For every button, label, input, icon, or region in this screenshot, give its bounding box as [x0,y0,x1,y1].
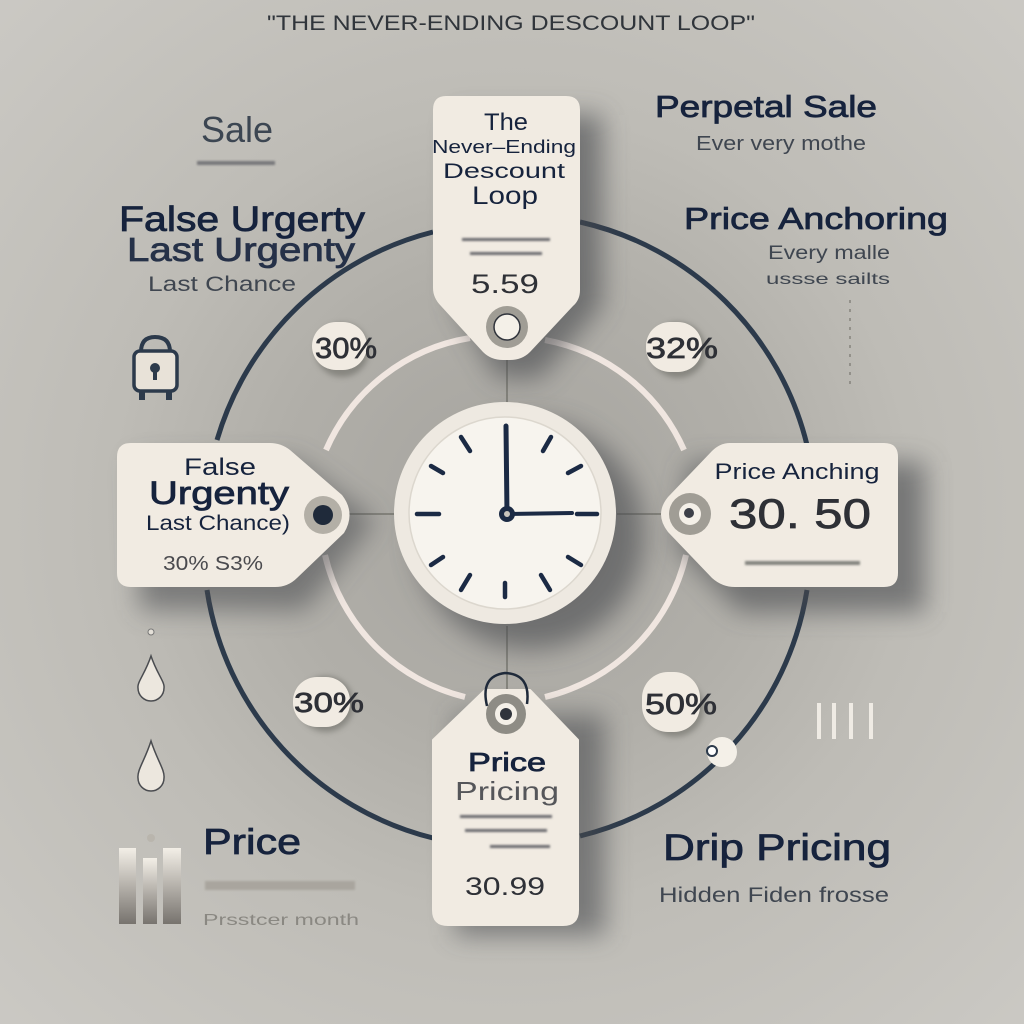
label: Price: Prsstcer month [203,912,359,929]
icon: bar marks right [817,703,873,739]
tag: right [661,443,925,612]
tag: left: Urgenty [149,475,289,511]
inner ring [325,338,686,697]
hole [304,496,342,534]
label: Price Anchoring: Every malle [768,243,890,264]
label: False Urgency [119,200,366,296]
icon: bar chart left [119,834,181,924]
hole [486,306,528,348]
tag: left [117,443,375,610]
tag: bottom [433,673,605,935]
clock ticks [417,437,597,597]
title: "THE NEVER-ENDING DESCOUNT LOOP" [267,11,755,35]
tag: left: Last Chance) [146,512,290,535]
label: Price Anchoring: Price Anchoring [684,201,948,236]
tag: top: Never–Ending [432,136,576,157]
label: Price Anchoring [684,201,948,288]
tag: right: 30. 50 [729,490,871,537]
clock hands [499,426,572,522]
badge: bottom right 50%: 50% [645,689,717,721]
hole [486,694,526,734]
badge: bottom right 50% [642,672,717,737]
label: Perpetual Sale: Ever very mothe [696,133,866,155]
tag: top: Loop [472,182,538,210]
outer ring [207,222,807,838]
icon: lower drop [138,741,164,791]
tag: top: Descount [443,160,565,183]
dotted mark [849,300,851,390]
label: Price Anchoring: ussse sailts [766,271,890,288]
fine print [462,238,550,255]
label: False Urgency: Last Urgenty [127,231,356,268]
badge: bottom left 30%: 30% [294,687,364,718]
connector lines [340,350,680,700]
badge: top left 30% [312,322,377,377]
label: Drip Pricing [659,827,891,907]
tag: bottom: Price [468,747,546,777]
label: Drip Pricing: Drip Pricing [663,827,891,868]
badge: top right 32%: 32% [646,333,718,365]
label: Drip Pricing: Hidden Fiden frosse [659,884,889,907]
icon: padlock [134,337,177,400]
label: Price: Price [203,821,301,862]
tag: right: Price Anching [714,459,880,484]
label: False Urgency: False Urgerty [119,200,366,239]
label: Price [203,821,359,929]
tag: bottom: 30.99 [465,873,545,901]
label: Sale [197,109,275,165]
fine print [460,815,552,848]
icon: upper drop [138,629,164,701]
hole [669,493,711,535]
tag: top: 5.59 [471,269,539,299]
badge: top left 30%: 30% [315,333,377,365]
badge: top right 32% [646,322,718,378]
ring marker [707,737,737,767]
badge: bottom left 30% [293,676,364,732]
tag: left: False [184,454,256,481]
tag: left: 30% S3% [163,553,263,575]
tag: top [432,96,602,378]
label: Perpetual Sale: Perpetal Sale [655,89,877,124]
tag: top: The [484,109,528,136]
label: Perpetual Sale [655,89,877,155]
label: False Urgency: Last Chance [148,273,296,296]
label: Sale: Sale [201,109,273,150]
clock [394,402,644,649]
fine print [745,561,860,565]
tag: bottom: Pricing [455,776,559,806]
